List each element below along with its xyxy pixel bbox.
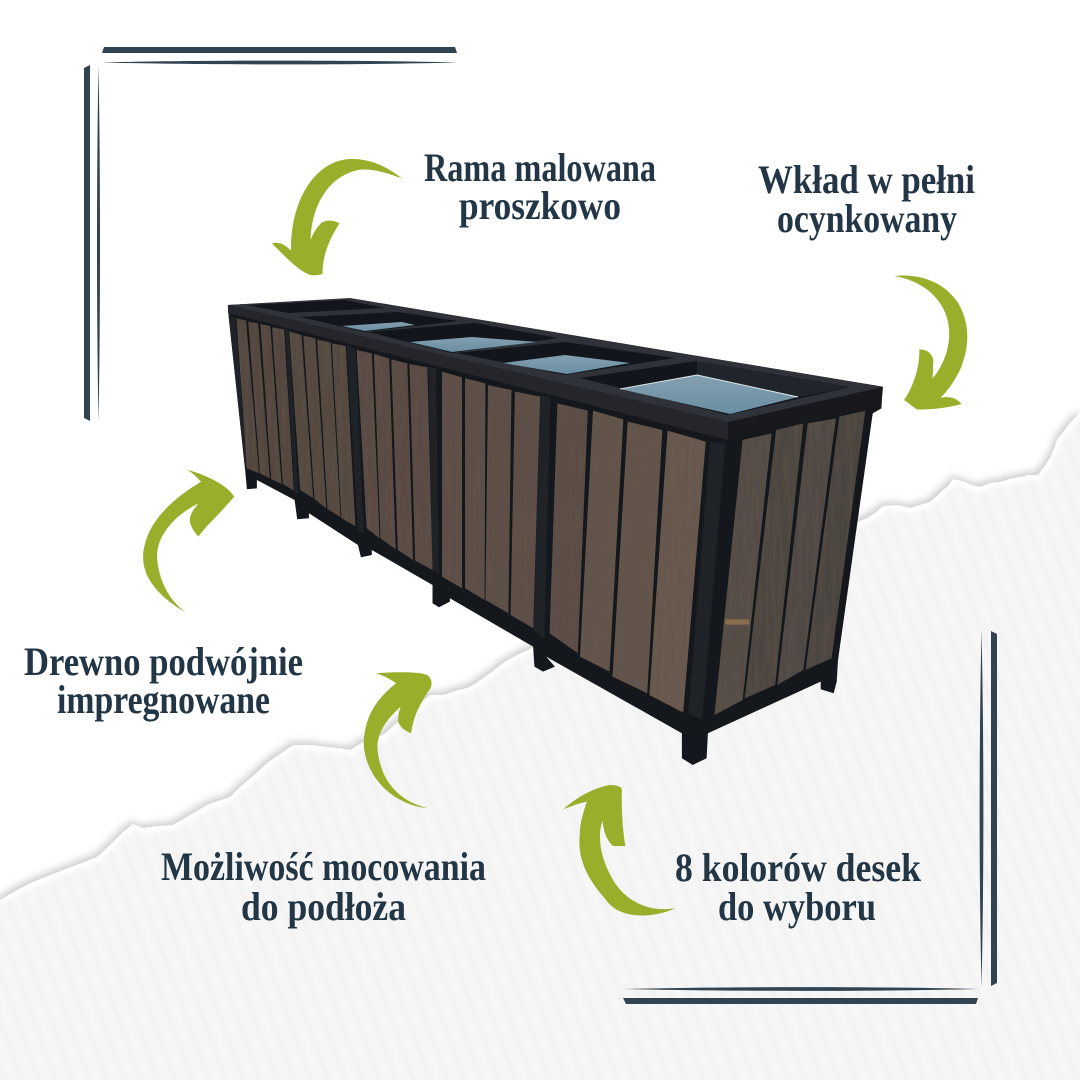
label: frame: Rama malowana: [424, 145, 656, 190]
label: wood: Drewno podwójnie: [24, 639, 303, 684]
planter frame silhouette: [228, 298, 883, 765]
arrow: frame: [272, 159, 402, 275]
label: colours: do wyboru: [718, 884, 876, 929]
label: mounting: [161, 844, 486, 929]
label: frame: proszkowo: [459, 183, 621, 228]
boards: panel 4: [442, 372, 540, 628]
arrow: mounting: [364, 672, 432, 808]
corner frame: top left: [84, 47, 457, 421]
label: mounting: Możliwość mocowania: [161, 844, 486, 889]
background: torn grey paper: [0, 410, 1080, 1080]
boards: panel 3: [357, 350, 433, 570]
label: frame: [424, 145, 656, 228]
label: mounting: do podłoża: [241, 884, 406, 929]
product: wooden planter with metal frame: [228, 298, 883, 765]
label: wood: [24, 639, 303, 722]
label: colours: [675, 845, 922, 929]
boards: panel 5 front: [550, 403, 706, 713]
panel posts: [229, 317, 550, 638]
label: insert: [758, 157, 975, 241]
label: insert: ocynkowany: [777, 196, 957, 241]
corner frame: bottom right: [623, 631, 997, 1004]
label: wood: impregnowane: [57, 677, 270, 722]
arrow: wood: [143, 469, 234, 613]
front post highlight and knot: [688, 442, 749, 720]
label: colours: 8 kolorów desek: [675, 845, 922, 890]
label: insert: Wkład w pełni: [758, 157, 975, 202]
arrow: colours: [563, 785, 675, 916]
arrow: insert: [894, 275, 967, 409]
boards: side panel: [714, 411, 865, 715]
boards: panel 1: [236, 318, 294, 491]
planter openings and galvanised inserts: [248, 300, 850, 415]
boards: panel 2: [289, 332, 355, 526]
planter rim: [228, 298, 883, 440]
